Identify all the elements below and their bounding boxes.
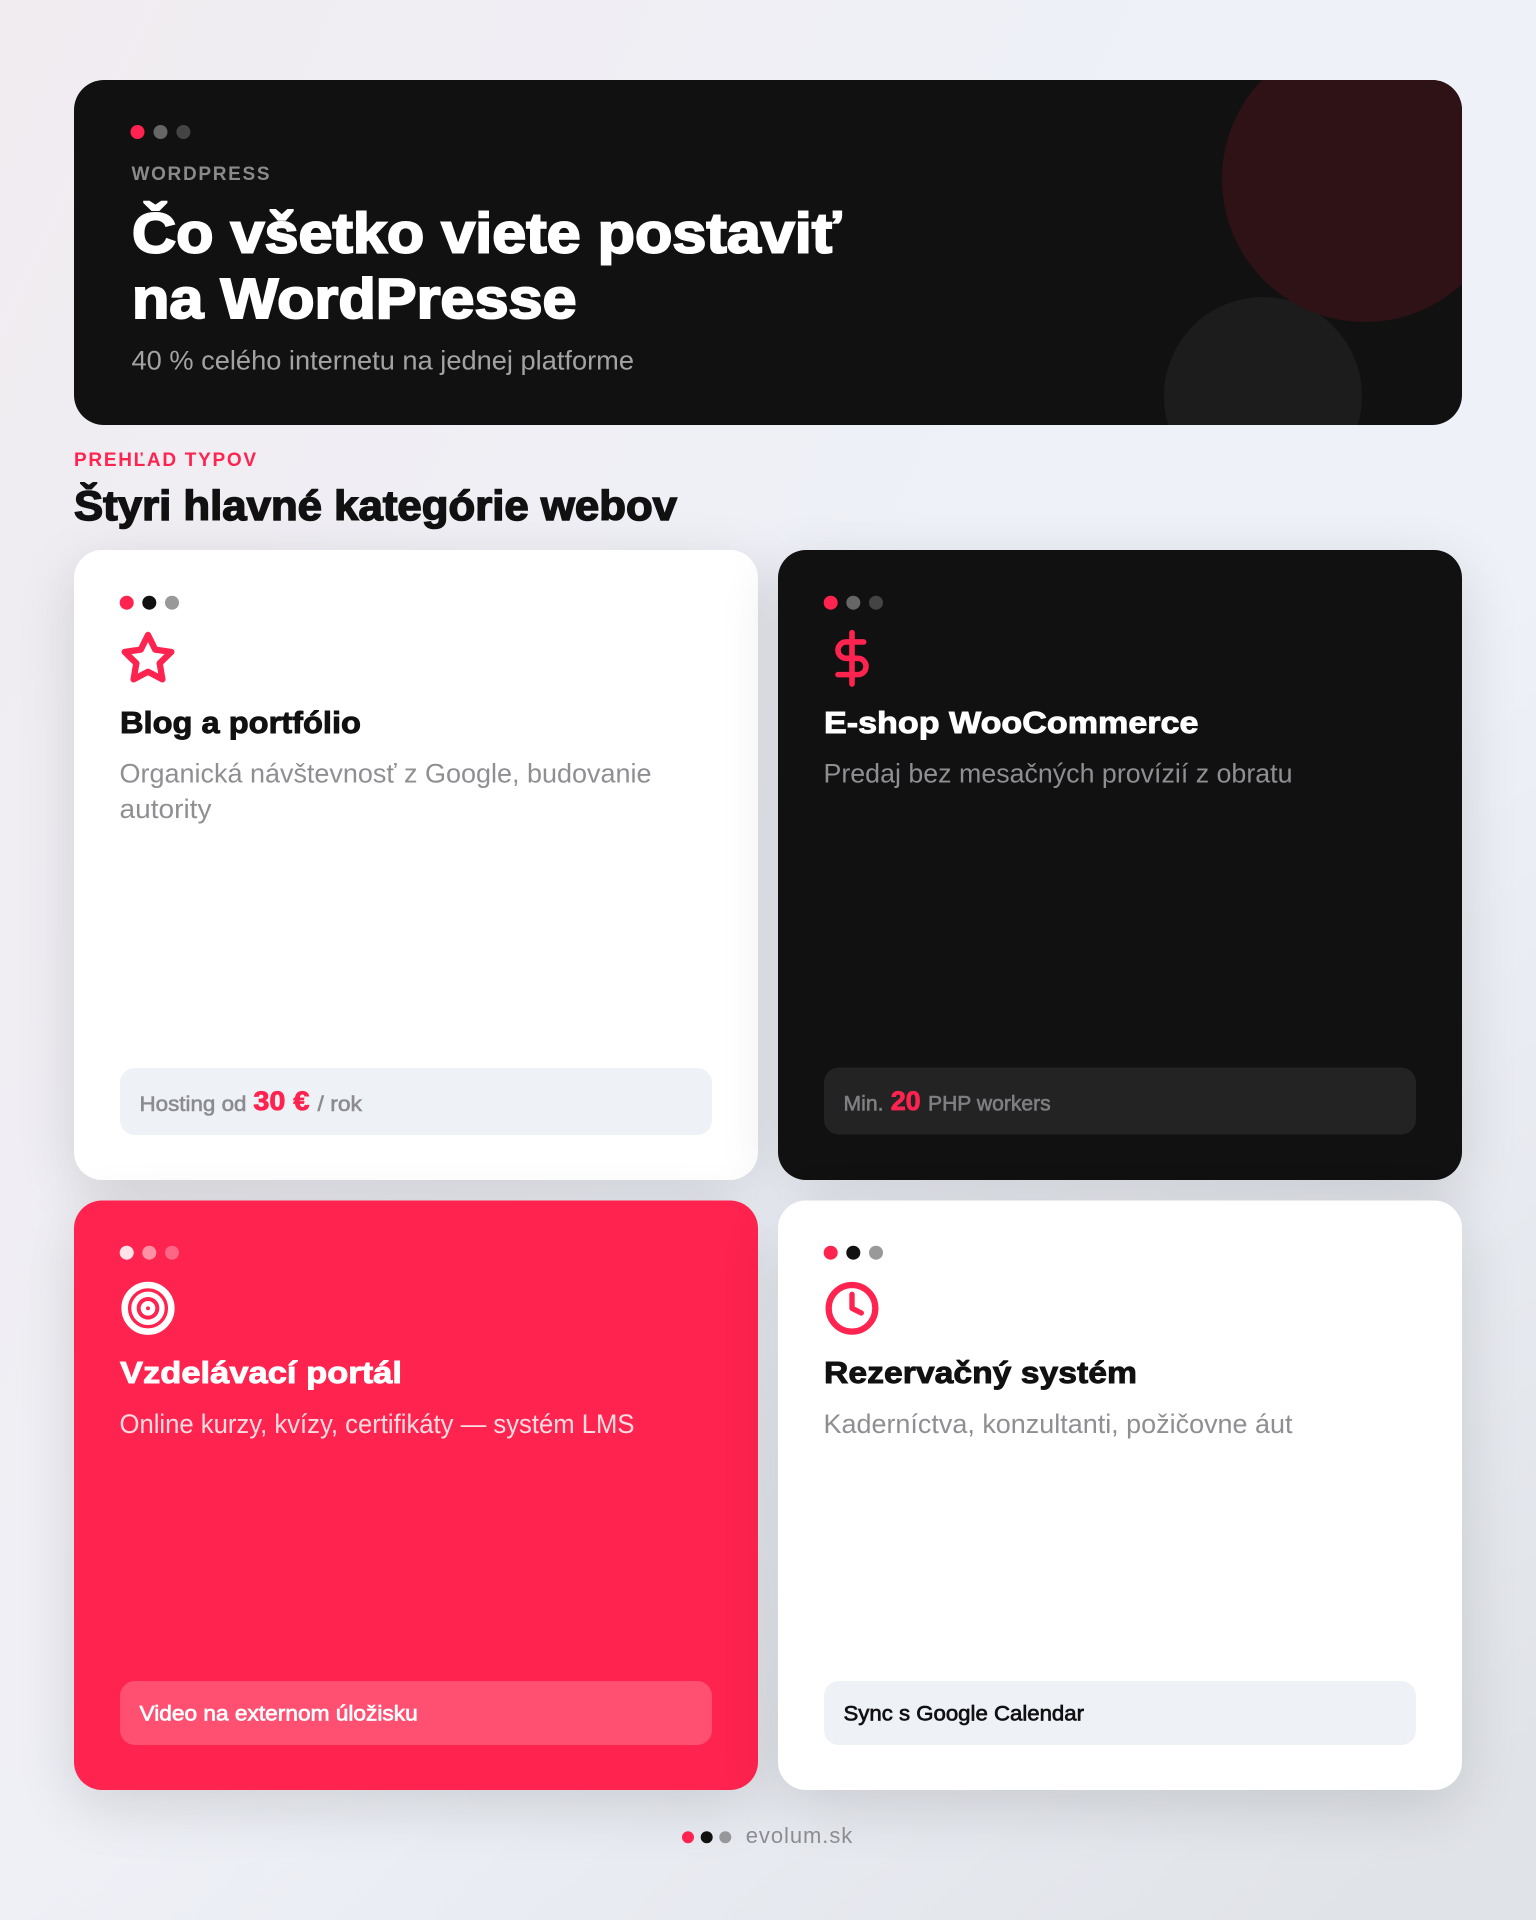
decorative red circle [1222, 80, 1462, 322]
stat pill: Video na externom úložisku [140, 1702, 418, 1726]
stat pill [120, 1068, 712, 1135]
section heading: Štyri hlavné kategórie webov [74, 481, 678, 529]
card description: Kaderníctva, konzultanti, požičovne áut [824, 1409, 1293, 1439]
window dots [120, 596, 179, 610]
card description [120, 759, 652, 824]
icon: star [125, 635, 171, 679]
grey circle [1164, 297, 1362, 425]
footer [682, 1823, 853, 1848]
stat pill [120, 1681, 712, 1745]
card description: Organická návštevnosť z Google, budovanie [120, 759, 652, 789]
stat pill: 20 [891, 1086, 921, 1116]
eyebrow: WORDPRESS [132, 164, 270, 185]
stat pill: Min. [844, 1092, 884, 1116]
icon: target [125, 1285, 171, 1332]
window dots [120, 1246, 179, 1260]
stat pill: 30 € [253, 1086, 309, 1116]
stat pill: PHP workers [928, 1092, 1051, 1116]
hero title [132, 201, 842, 331]
card title: E-shop WooCommerce [824, 705, 1198, 740]
window dots [824, 1246, 883, 1260]
window dots [824, 596, 883, 610]
card: Vzdelávací portál [74, 1200, 758, 1790]
window dots [130, 125, 190, 139]
section label: PREHĽAD TYPOV [74, 450, 256, 471]
stat pill [824, 1681, 1416, 1745]
hero banner [74, 80, 1462, 425]
card title: Blog a portfólio [120, 705, 361, 740]
card: E-shop WooCommerce [778, 550, 1462, 1180]
icon: dollar [838, 633, 866, 684]
card: Blog a portfólio [74, 550, 758, 1180]
hero title: na WordPresse [132, 267, 577, 331]
hero subtitle: 40 % celého internetu na jednej platforme [132, 346, 634, 376]
footer: evolum.sk [746, 1823, 853, 1848]
card description: Online kurzy, kvízy, certifikáty — systém LMS [120, 1409, 634, 1439]
stat pill [824, 1068, 1416, 1134]
stat pill: / rok [318, 1092, 362, 1116]
card: Rezervačný systém [778, 1200, 1462, 1790]
stat pill: Sync s Google Calendar [844, 1702, 1084, 1726]
card title: Rezervačný systém [824, 1355, 1137, 1390]
card description: Predaj bez mesačných provízií z obratu [824, 759, 1292, 789]
stat pill: Hosting od [140, 1092, 246, 1116]
icon: clock [829, 1285, 875, 1332]
card description: autority [120, 794, 212, 824]
hero title: Čo všetko viete postaviť [132, 201, 842, 266]
card title: Vzdelávací portál [120, 1355, 402, 1390]
